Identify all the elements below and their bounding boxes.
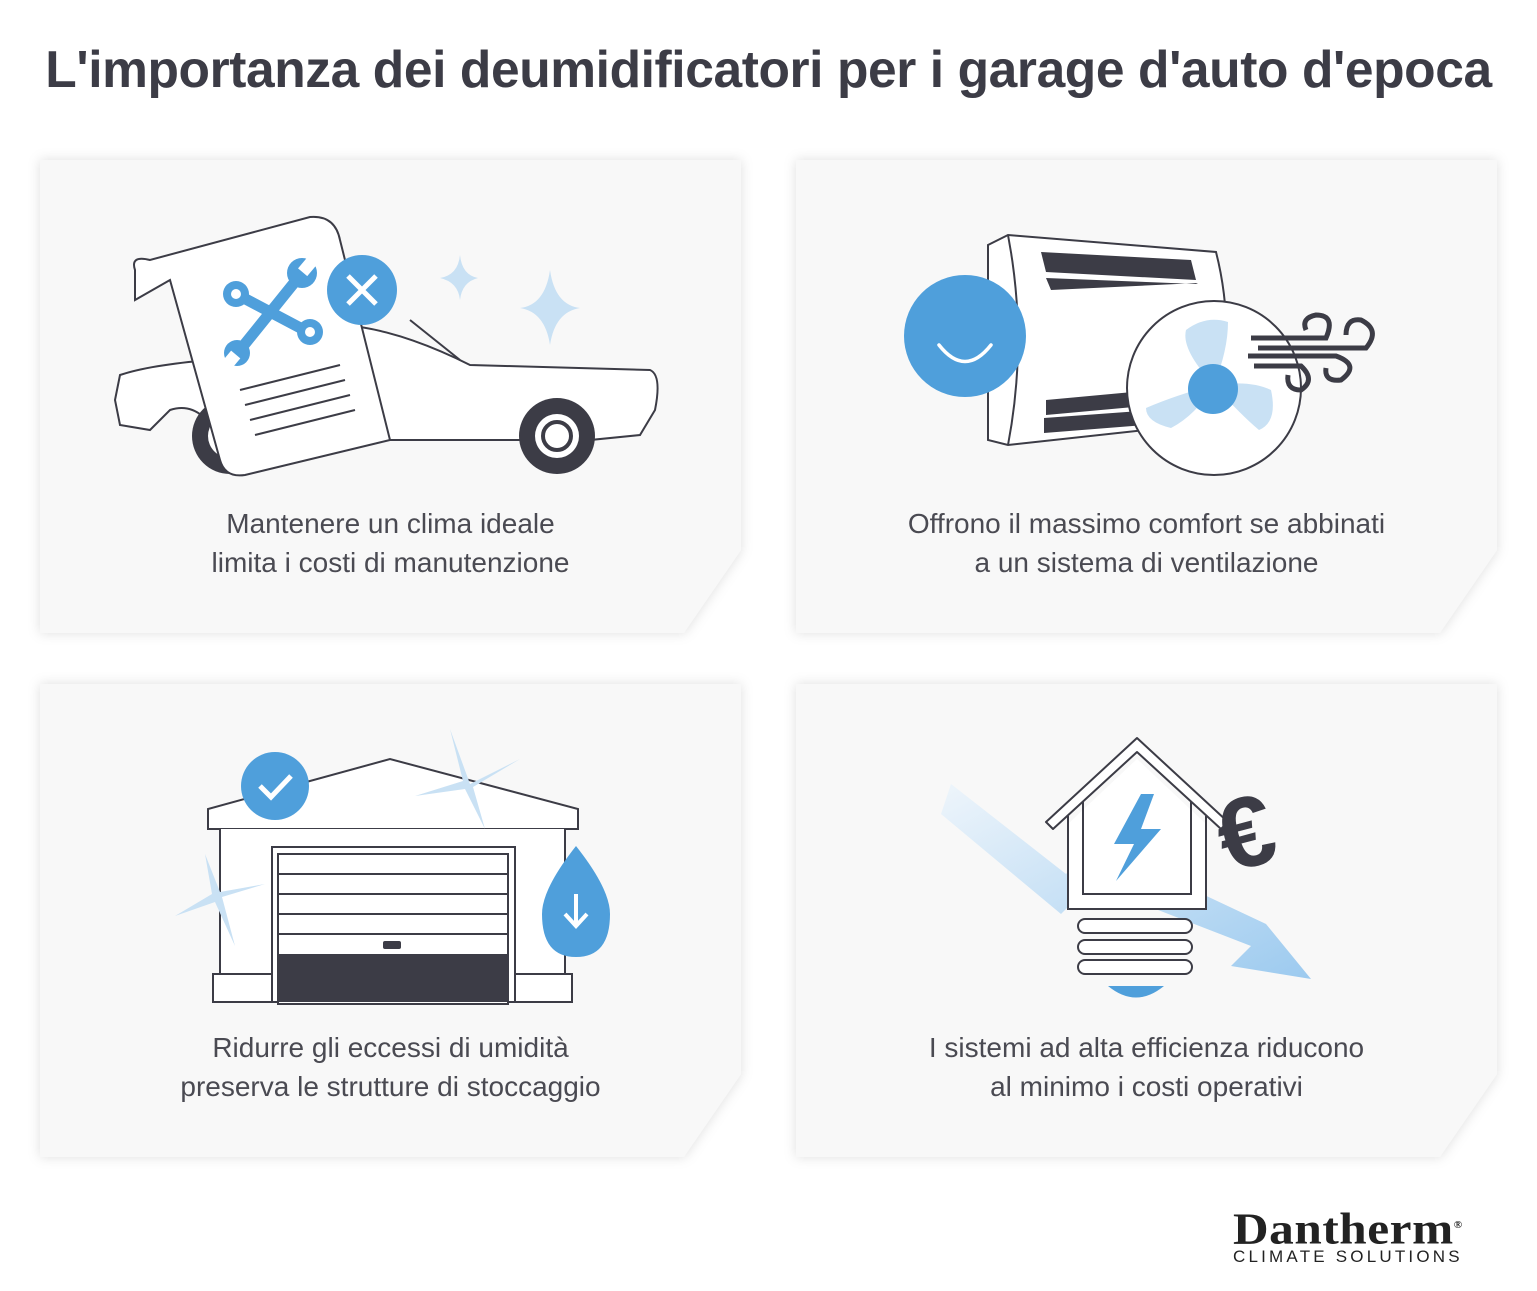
text: comfort: Offrono il massimo comfort se abbinati <box>908 508 1385 539</box>
panel: humidity <box>36 680 745 1161</box>
text: maintenance <box>213 513 568 572</box>
icon: house bulb with arrow and euro: € <box>1204 772 1287 894</box>
text: humidity <box>182 1036 600 1102</box>
panel: maintenance <box>36 156 745 637</box>
text: maintenance: limita i costi di manutenzione <box>212 547 569 578</box>
text: humidity: preserva le strutture di stoccaggio <box>180 1071 601 1102</box>
text: efficiency <box>931 1037 1363 1102</box>
panel: comfort <box>792 156 1501 637</box>
text: comfort <box>909 513 1384 572</box>
text: humidity: Ridurre gli eccessi di umidità <box>212 1032 569 1063</box>
icon: wrenches <box>222 256 323 369</box>
text: efficiency: I sistemi ad alta efficienza riducono <box>929 1032 1364 1063</box>
logo: CLIMATE SOLUTIONS <box>1233 1247 1463 1266</box>
icon: ventilation unit with fan <box>904 234 1375 476</box>
logo: Dantherm® <box>1233 1205 1463 1254</box>
text: maintenance: Mantenere un clima ideale <box>226 508 555 539</box>
title: L'importanza dei deumidificatori per i garage d'auto d'epoca <box>45 40 1492 98</box>
icon: car with document <box>114 216 659 476</box>
text: comfort: a un sistema di ventilazione <box>974 547 1318 578</box>
text: efficiency: al minimo i costi operativi <box>990 1071 1303 1102</box>
panel: efficiency <box>792 680 1501 1161</box>
icon: garage <box>176 730 610 1005</box>
icon: house bulb with arrow and euro <box>941 737 1311 998</box>
